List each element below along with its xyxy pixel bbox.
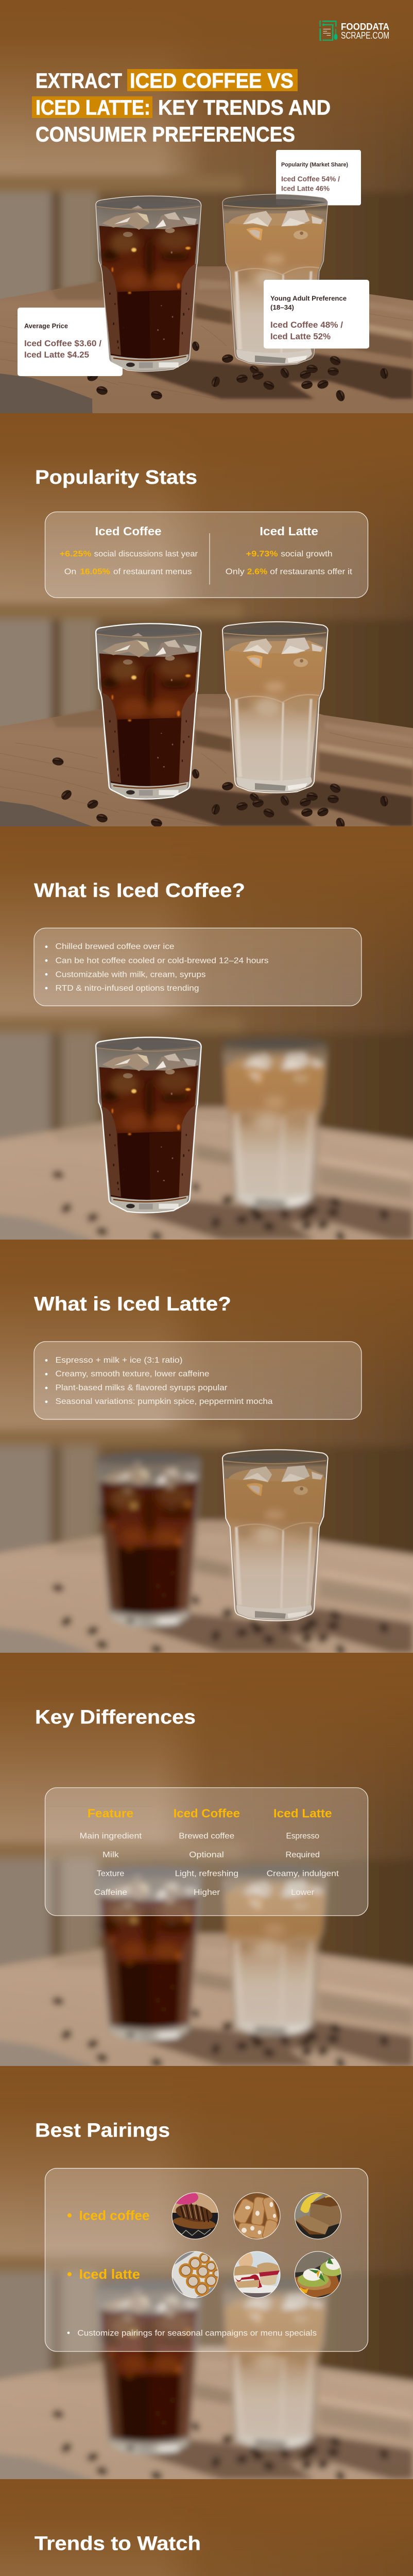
column: iced latte: Lower xyxy=(291,1888,315,1897)
iced coffee stats column: +6.25% xyxy=(60,550,92,558)
callout: popularity market share: Iced Coffee 54% / xyxy=(281,175,340,183)
iced latte stats column: social growth xyxy=(281,550,333,558)
iced latte stats column: of restaurants offer it xyxy=(270,568,352,577)
heading: what is iced coffee: What is Iced Coffee? xyxy=(34,880,245,902)
column: iced latte: Creamy, indulgent xyxy=(267,1870,339,1878)
column: iced coffee xyxy=(174,1806,240,1897)
panel: iced latte bullets xyxy=(34,1342,362,1419)
food photo: banana bread xyxy=(294,2192,343,2240)
callout: young adult preference: Iced Coffee 48% / xyxy=(270,320,343,330)
iced latte stats column: Iced Latte xyxy=(260,524,318,538)
column: iced coffee: Higher xyxy=(194,1888,220,1897)
callout: average price: Iced Latte $4.25 xyxy=(24,350,89,360)
column: feature: Main ingredient xyxy=(79,1832,142,1840)
panel: iced coffee bullets: RTD & nitro-infused options trending xyxy=(56,984,199,993)
panel: iced coffee bullets: Customizable with milk, cream, syrups xyxy=(56,970,206,979)
panel: iced coffee bullets: Can be hot coffee cooled or cold-brewed 12–24 hours xyxy=(56,956,269,965)
section: hero xyxy=(0,0,413,594)
section: what is iced latte xyxy=(0,1240,413,1653)
column: feature: Texture xyxy=(97,1870,125,1878)
blurred background with coffee xyxy=(0,1209,413,1684)
hero brown gradient overlay xyxy=(0,0,413,185)
section: what is iced coffee xyxy=(0,822,413,1240)
column: feature: Caffeine xyxy=(94,1888,127,1897)
title: CONSUMER PREFERENCES xyxy=(36,123,295,146)
glass: iced latte xyxy=(222,194,328,365)
brown gradient overlay xyxy=(0,1653,413,1854)
brown gradient overlay xyxy=(0,826,413,1027)
callout: average price: Average Price xyxy=(24,322,68,330)
column: iced latte: Espresso xyxy=(286,1832,319,1840)
food photo: avocado toast with egg xyxy=(294,2251,345,2298)
section: popularity stats xyxy=(0,413,413,826)
food photo: almond biscotti xyxy=(233,2192,281,2241)
panel: comparison table xyxy=(45,1788,368,1916)
title xyxy=(32,69,331,146)
column: iced coffee: Light, refreshing xyxy=(175,1870,238,1878)
column: iced coffee: Iced Coffee xyxy=(174,1806,240,1820)
column: iced latte: Iced Latte xyxy=(273,1806,332,1820)
brown gradient overlay xyxy=(0,1240,413,1440)
logo: FoodData Scrape top right xyxy=(319,21,389,41)
title: EXTRACT xyxy=(36,69,122,93)
callout: young adult preference: Young Adult Preference xyxy=(270,295,347,302)
food photo: chocolate croissant xyxy=(172,2193,218,2239)
blurred background xyxy=(0,2448,413,2576)
title: ICED COFFEE VS xyxy=(130,69,294,93)
callout: popularity market share: Iced Latte 46% xyxy=(281,185,330,193)
callout: popularity market share xyxy=(276,150,361,205)
blurred background with both glasses xyxy=(0,1622,413,2097)
heading: key differences: Key Differences xyxy=(35,1706,196,1728)
glass: iced latte xyxy=(222,622,328,793)
panel: iced latte bullets: Plant-based milks & flavored syrups popular xyxy=(56,1383,228,1392)
panel: iced coffee bullets: Chilled brewed coffee over ice xyxy=(56,942,175,951)
glass: iced coffee xyxy=(96,196,201,371)
glass: iced coffee xyxy=(96,623,201,799)
iced coffee stats column: 16.05% xyxy=(80,568,110,577)
iced latte stats column: +9.73% xyxy=(246,550,278,558)
column: feature xyxy=(79,1806,142,1897)
iced coffee stats column: Iced Coffee xyxy=(95,524,162,538)
panel: iced coffee bullets xyxy=(34,928,362,1006)
panel: popularity comparison xyxy=(45,512,368,598)
panel: iced latte bullets: Espresso + milk + ice (3:1 ratio) xyxy=(56,1356,182,1365)
heading: what is iced latte: What is Iced Latte? xyxy=(34,1293,231,1315)
title: KEY TRENDS AND xyxy=(158,95,331,119)
column: iced latte xyxy=(267,1806,339,1897)
iced coffee stats column: On xyxy=(64,568,76,577)
panel: food pairings xyxy=(45,2168,368,2351)
title: ICED LATTE: xyxy=(36,95,150,119)
heading: best pairings: Best Pairings xyxy=(35,2120,170,2141)
glass: iced latte xyxy=(222,1450,328,1621)
glass: iced coffee xyxy=(96,1037,201,1213)
brown gradient overlay xyxy=(0,2479,413,2576)
iced latte stats column xyxy=(226,524,352,577)
bullet: customize pairings: Customize pairings for seasonal campaigns or menu specials xyxy=(77,2329,317,2338)
panel: iced latte bullets: Creamy, smooth texture, lower caffeine xyxy=(56,1369,210,1378)
section: trends to watch xyxy=(0,2479,413,2576)
blurred background with both glasses xyxy=(0,2035,413,2510)
food photo: scones with jam xyxy=(234,2251,280,2298)
callout: average price xyxy=(18,308,123,376)
iced coffee stats column: social discussions last year xyxy=(94,550,198,558)
blurred background with latte xyxy=(0,795,413,1270)
callout: popularity market share: Popularity (Market Share) xyxy=(281,162,348,168)
brown gradient overlay xyxy=(0,2066,413,2267)
column: iced coffee: Optional xyxy=(189,1851,224,1859)
callout: young adult preference xyxy=(264,280,369,348)
food photo: cinnamon rolls xyxy=(172,2251,218,2298)
heading: popularity stats: Popularity Stats xyxy=(35,467,197,488)
section: best pairings xyxy=(0,2066,413,2479)
heading: trends to watch: Trends to Watch xyxy=(35,2533,201,2554)
label: iced coffee: Iced coffee xyxy=(79,2208,149,2223)
callout: average price: Iced Coffee $3.60 / xyxy=(24,338,101,348)
column: iced latte: Required xyxy=(285,1851,320,1859)
iced coffee stats column xyxy=(60,524,198,577)
popularity background scene xyxy=(0,382,413,857)
column: feature: Milk xyxy=(102,1851,119,1859)
logo: FoodData Scrape top right: SCRAPE.COM xyxy=(341,30,389,41)
callout: young adult preference: Iced Latte 52% xyxy=(270,332,331,342)
callout: young adult preference: (18–34) xyxy=(270,303,294,311)
column: iced coffee: Brewed coffee xyxy=(179,1832,234,1840)
panel: iced latte bullets: Seasonal variations: pumpkin spice, peppermint mocha xyxy=(56,1397,273,1406)
iced latte stats column: Only xyxy=(226,568,245,577)
logo: FoodData Scrape top right: FOODDATA xyxy=(341,22,389,32)
column: feature: Feature xyxy=(88,1806,133,1820)
label: iced latte: Iced latte xyxy=(79,2266,140,2282)
iced latte stats column: 2.6% xyxy=(247,568,267,577)
popularity brown gradient overlay xyxy=(0,413,413,614)
iced coffee stats column: of restaurant menus xyxy=(113,568,192,577)
section: key differences xyxy=(0,1653,413,2066)
hero background: cafe table scene xyxy=(0,0,413,430)
